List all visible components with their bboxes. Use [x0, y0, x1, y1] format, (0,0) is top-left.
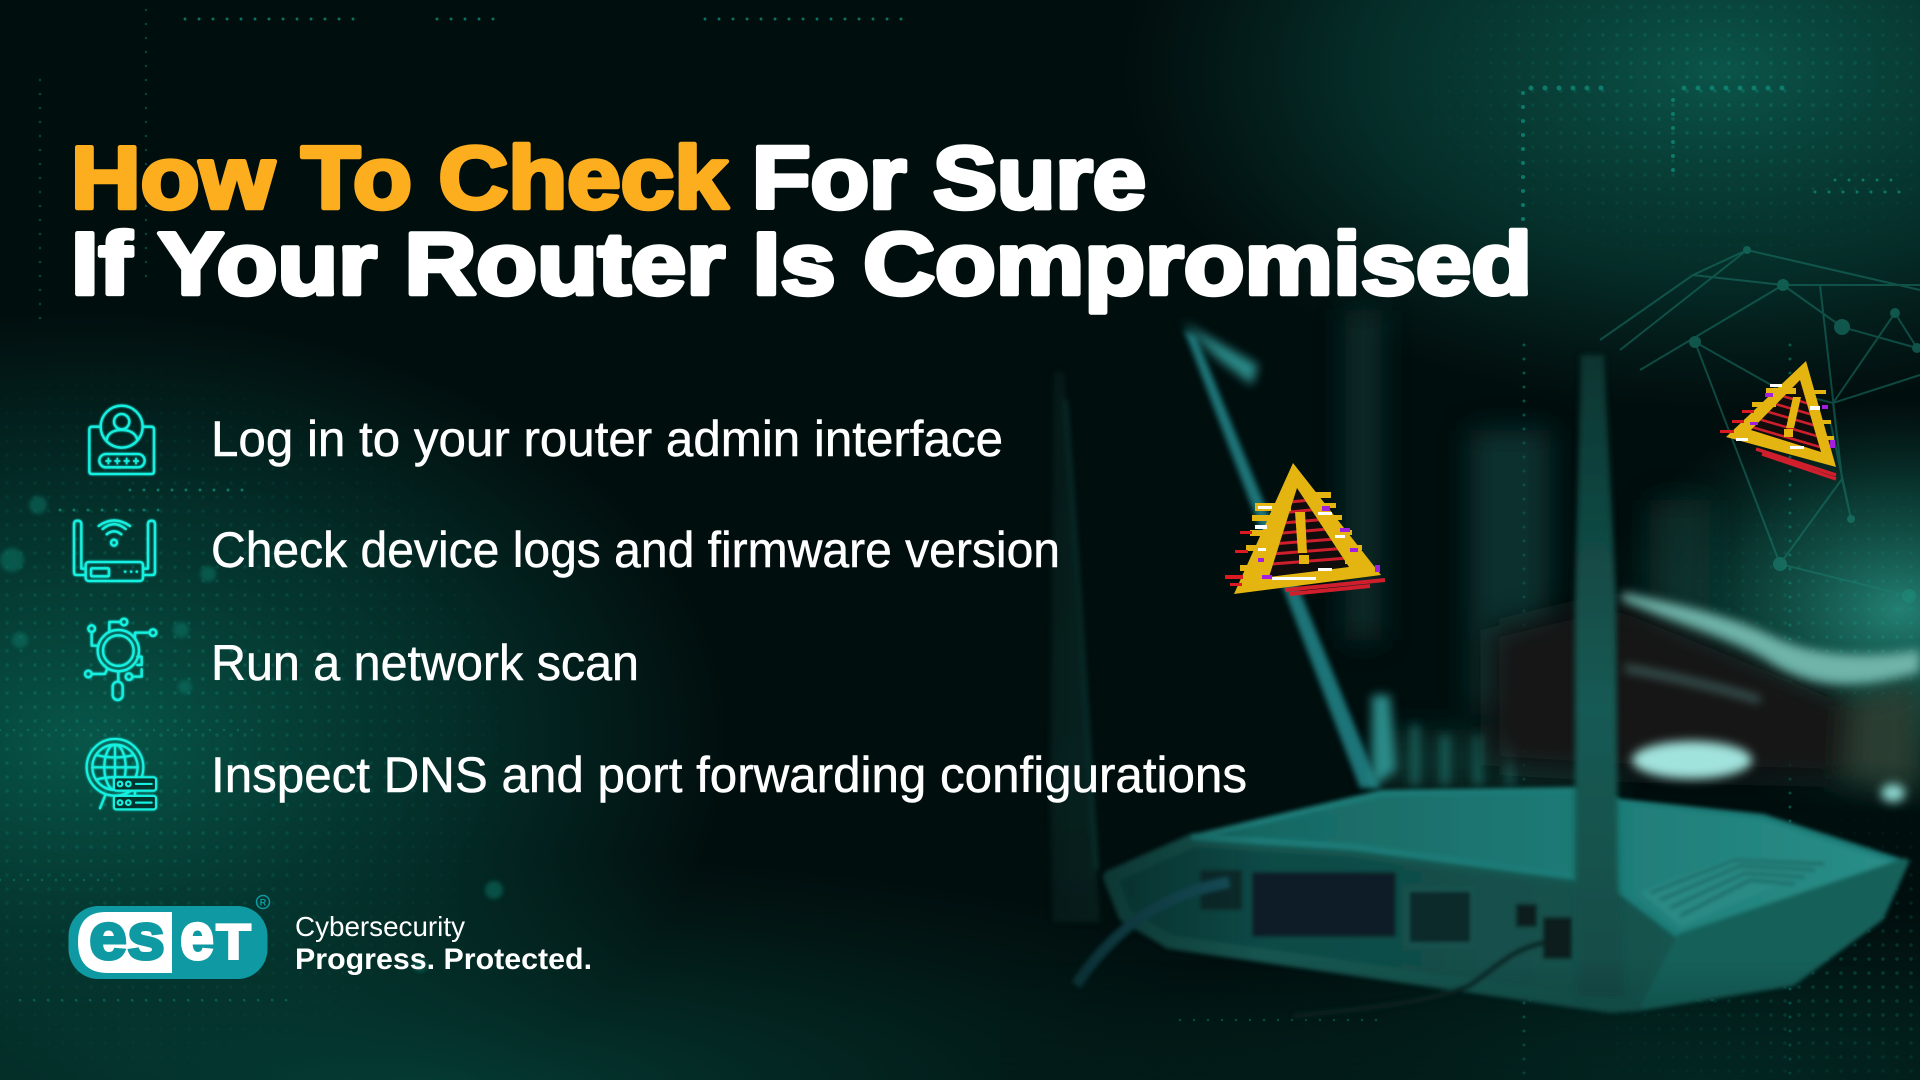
step 1: log in [89, 406, 1003, 474]
icon: globe and servers [87, 739, 156, 809]
title: For Sure [752, 128, 1146, 227]
warning triangle: right [1720, 361, 1836, 479]
ESET logo: e [180, 899, 214, 973]
tagline: Cybersecurity [295, 911, 465, 942]
network lines graphic [1600, 246, 1920, 603]
text: step 2: Check device logs and firmware version [211, 522, 1060, 578]
tagline: Progress. Protected. [295, 943, 592, 976]
step 3: network scan [85, 619, 639, 700]
ESET logo: T [216, 914, 251, 970]
ESET logo [68, 896, 270, 979]
step 2: check logs [74, 520, 1060, 581]
icon: router [74, 520, 155, 581]
blurred photo: laptop and hand [1182, 310, 1920, 802]
step list [74, 406, 1247, 809]
tagline [295, 911, 592, 976]
text: step 1: Log in to your router admin interface [211, 411, 1003, 467]
warning triangle: center [1225, 463, 1385, 594]
right antenna [1575, 355, 1625, 996]
router body [1076, 790, 1905, 1016]
text: step 4: Inspect DNS and port forwarding configurations [211, 747, 1247, 803]
ESET logo: R [260, 898, 267, 908]
left antenna [1050, 372, 1100, 922]
text: step 3: Run a network scan [211, 635, 639, 691]
title: How To Check [71, 128, 729, 227]
title: If Your Router Is Compromised [71, 214, 1532, 313]
router photo [1050, 355, 1905, 1016]
title [71, 128, 1532, 313]
bottom fade [1000, 960, 1920, 1080]
icon: network scan magnifier [85, 619, 156, 700]
icon: user login [89, 406, 154, 474]
ESET logo: es [89, 899, 165, 973]
step 4: inspect DNS [87, 739, 1247, 809]
